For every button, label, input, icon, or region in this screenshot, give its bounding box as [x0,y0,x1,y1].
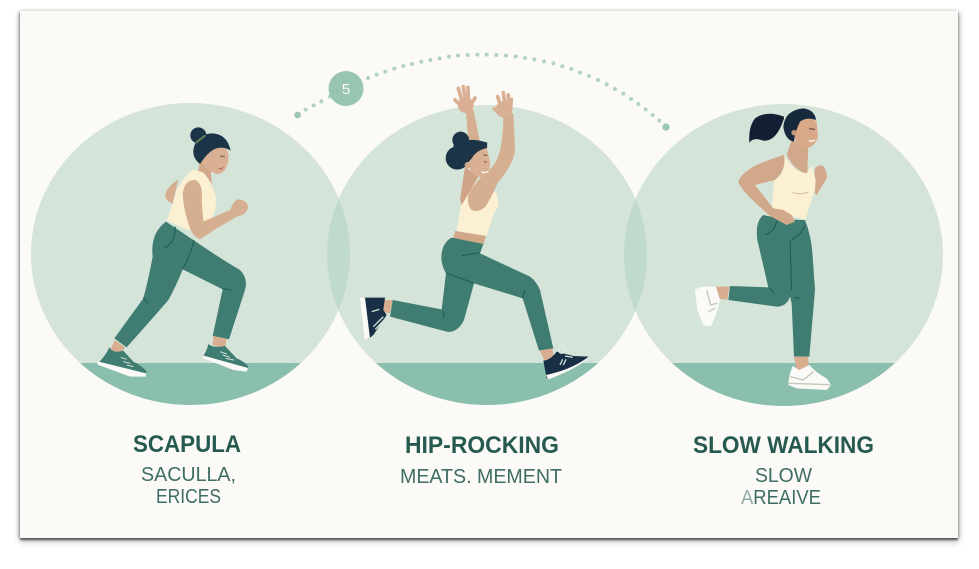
heading: scapula: SCAPULA [133,431,241,458]
text block: slow walking description: SLOW [755,465,812,487]
text block: slow walking description [741,465,821,509]
panel: scapula circle [30,103,352,407]
step number badge [328,71,364,106]
text block: scapula description: SACULLA, [141,464,236,486]
panel: slow walking circle [623,104,945,407]
overlap: second and third circles [624,199,647,311]
figure: scapula runner [98,127,248,377]
text block: hip-rocking description: MEATS. MEMENT [400,466,562,488]
dotted arc connector [294,53,670,131]
panel: hip-rocking circle [326,105,648,407]
heading: slow walking: SLOW WALKING [693,432,874,459]
text block: scapula description [141,464,236,508]
figure: hip-rocking lunge [360,87,588,379]
infographic canvas [31,52,943,504]
overlap: first and second circles [327,198,350,310]
text block: slow walking description: AREAIVE [741,487,821,509]
figure: slow walking [695,108,831,390]
step number badge: 5 [342,81,350,98]
text block: scapula description: ERICES [156,486,221,508]
heading: hip-rocking: HIP-ROCKING [405,432,559,459]
